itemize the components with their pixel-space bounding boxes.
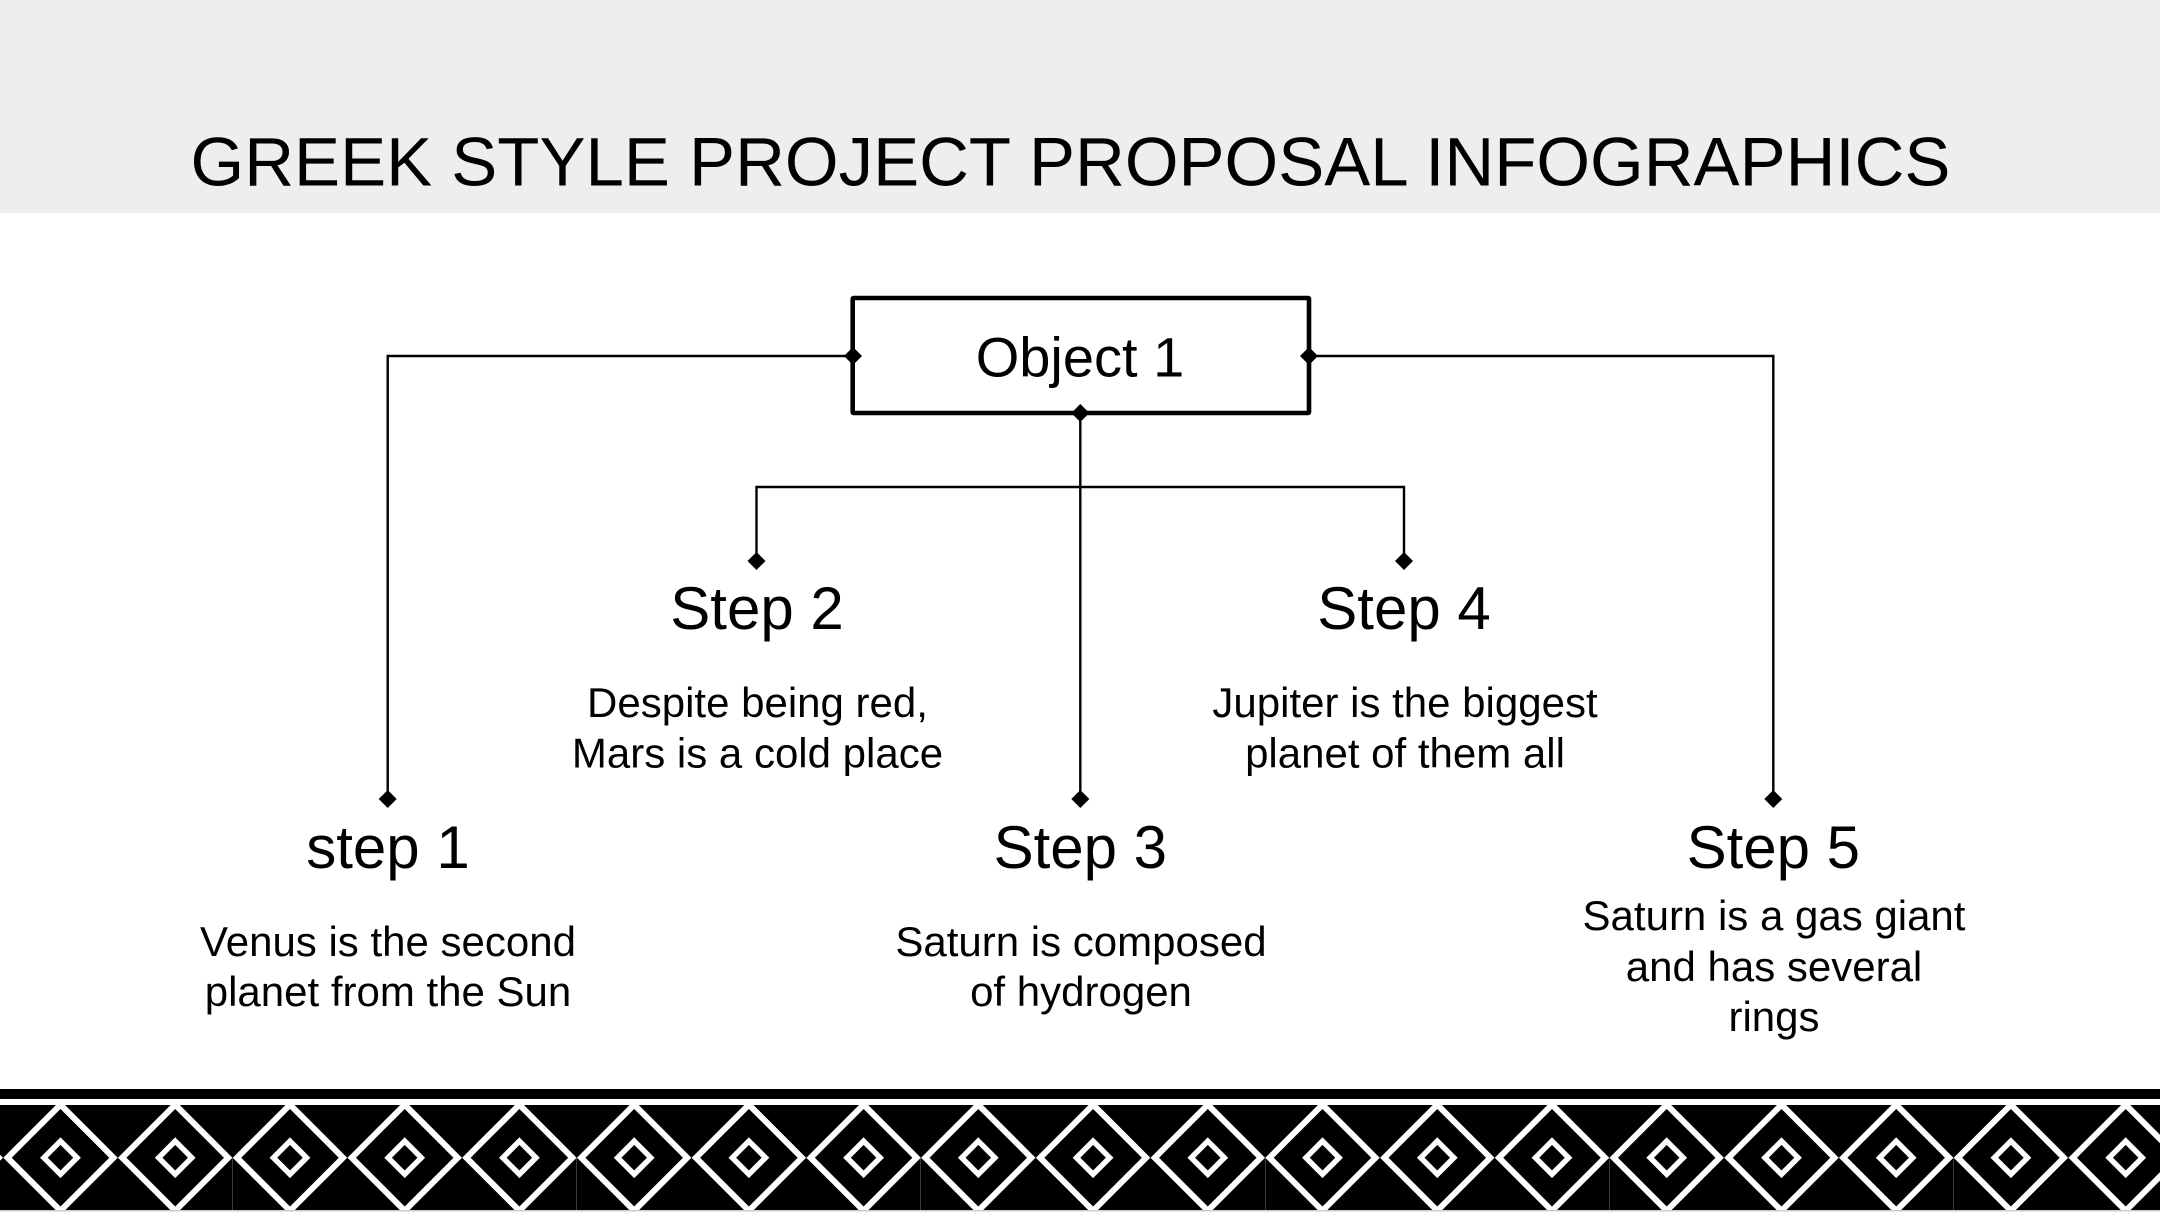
step 2: Step 2 [670,575,844,642]
header band [0,0,2160,213]
connector diamond markers [379,347,1782,808]
title: GREEK STYLE PROJECT PROPOSAL INFOGRAPHICS [191,124,1950,200]
step 3 [895,814,1267,1015]
box: Object 1 [853,298,1309,413]
box: Object 1: Object 1 [976,326,1184,388]
step 4: planet of them all [1245,730,1565,776]
step 2: Mars is a cold place [572,730,943,776]
step 1: planet from the Sun [205,968,571,1015]
step 1: Venus is the second [200,918,576,965]
step 3: of hydrogen [970,968,1192,1015]
step 1: step 1 [306,814,470,881]
step 5: and has several [1626,943,1922,990]
step 5 [1583,814,1966,1040]
step 5: Step 5 [1687,814,1860,881]
step 1 [200,814,576,1015]
step 3: Step 3 [994,814,1167,881]
step 3: Saturn is composed [895,918,1267,965]
step 5: Saturn is a gas giant [1583,892,1966,939]
step 4 [1212,575,1598,776]
connector lines [388,356,1773,799]
step 4: Step 4 [1317,575,1491,642]
step 5: rings [1728,993,1820,1040]
step 2: Despite being red, [587,679,928,726]
step 4: Jupiter is the biggest [1212,679,1598,726]
step 2 [572,575,943,776]
greek key border [0,1089,2160,1212]
